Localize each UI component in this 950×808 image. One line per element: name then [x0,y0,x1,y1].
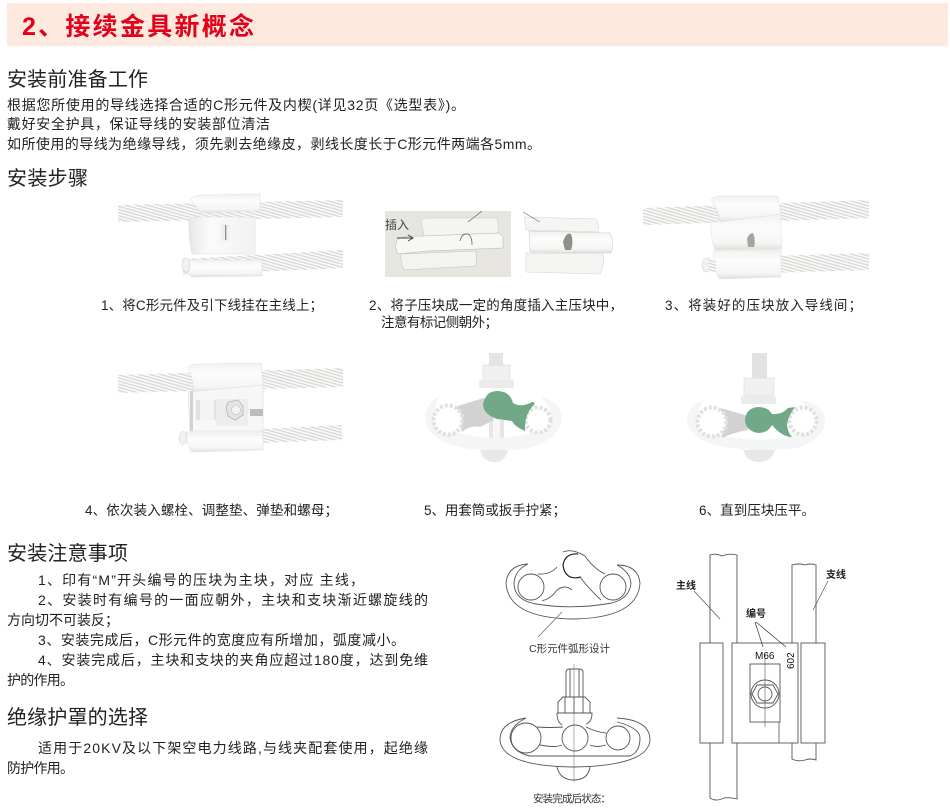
nut [751,680,779,708]
step 2 photo: insert [385,211,511,277]
label: C element: C形元件弧形设计 [529,642,610,655]
notes text: 4、安装完成后，主块和支块的夹角应超过180度，达到免维 [38,652,428,668]
notes text: 3、安装完成后，C形元件的宽度应有所增加，弧度减小。 [38,632,405,648]
label: after installation: 安装完成后状态： [533,792,611,805]
section: preparation [7,68,541,152]
step 1 caption: 1、将C形元件及引下线挂在主线上； [101,298,323,314]
notes text: 方向切不可装反； [7,612,119,629]
notes text [7,572,428,688]
label: branch line [813,568,846,610]
step 6 caption: 6、直到压块压平。 [699,503,815,518]
heading: install steps: 安装步骤 [7,167,88,190]
green block [745,407,795,437]
section: insulating cover [7,706,428,776]
line drawing: after installation [500,664,650,782]
step 4 caption: 4、依次装入螺栓、调整垫、弹垫和螺母； [85,503,338,519]
branch cable [792,564,816,761]
label: number: 编号 [746,607,766,620]
preparation text [7,97,541,152]
marking: 602: 602 [786,652,797,669]
preparation text: 戴好安全护具，保证导线的安装部位清洁 [7,116,270,132]
preparation text: 如所使用的导线为绝缘导线，须先剥去绝缘皮，剥线长度长于C形元件两端各5mm。 [7,136,541,152]
heading: preparation: 安装前准备工作 [7,68,148,91]
step 3 photo [643,196,869,279]
step 2 caption: 注意有标记侧朝外； [381,314,498,331]
header band [7,3,948,46]
title: 2、接续金具新概念 [22,12,254,41]
step 3 caption: 3、将装好的压块放入导线间； [665,298,862,314]
preparation text: 根据您所使用的导线选择合适的C形元件及内楔(详见32页《选型表》)。 [7,97,465,113]
label: insert: 插入 [385,218,409,232]
step 2 caption [369,298,623,331]
insulating cover text: 防护作用。 [7,760,74,776]
step 5 caption: 5、用套筒或扳手拧紧； [424,502,566,519]
main cable [710,554,737,800]
blocks [700,643,825,743]
marking: M66: M66 [755,651,775,662]
insulating cover text: 适用于20KV及以下架空电力线路,与线夹配套使用，起绝缘 [38,740,428,756]
heading: insulating cover: 绝缘护罩的选择 [7,706,148,729]
label: main line: 主线 [676,579,696,592]
bolt and nut [741,353,776,404]
line drawing: top view with labels [676,554,846,800]
insulating cover text [7,740,428,776]
step 2 caption: 2、将子压块成一定的角度插入主压块中， [369,298,623,313]
heading: notes: 安装注意事项 [7,542,128,565]
step 2 photo: detail [523,212,613,274]
label: number [746,607,786,647]
bolt and nut [479,353,514,452]
label: branch line: 支线 [826,568,846,581]
step 1 photo [118,194,343,277]
notes text: 1、印有“M”开头编号的压块为主块，对应 主线， [38,572,364,588]
step 6 photo [687,353,825,462]
step 5 photo [425,353,562,462]
notes text: 2、安装时有编号的一面应朝外，主块和支块渐近螺旋线的 [38,592,428,608]
notes text: 护的作用。 [7,672,74,688]
green block [483,391,535,431]
line drawing: C element arc design [506,551,640,637]
label: main line [676,579,720,619]
step 4 photo [118,363,343,452]
section: notes [7,542,428,688]
